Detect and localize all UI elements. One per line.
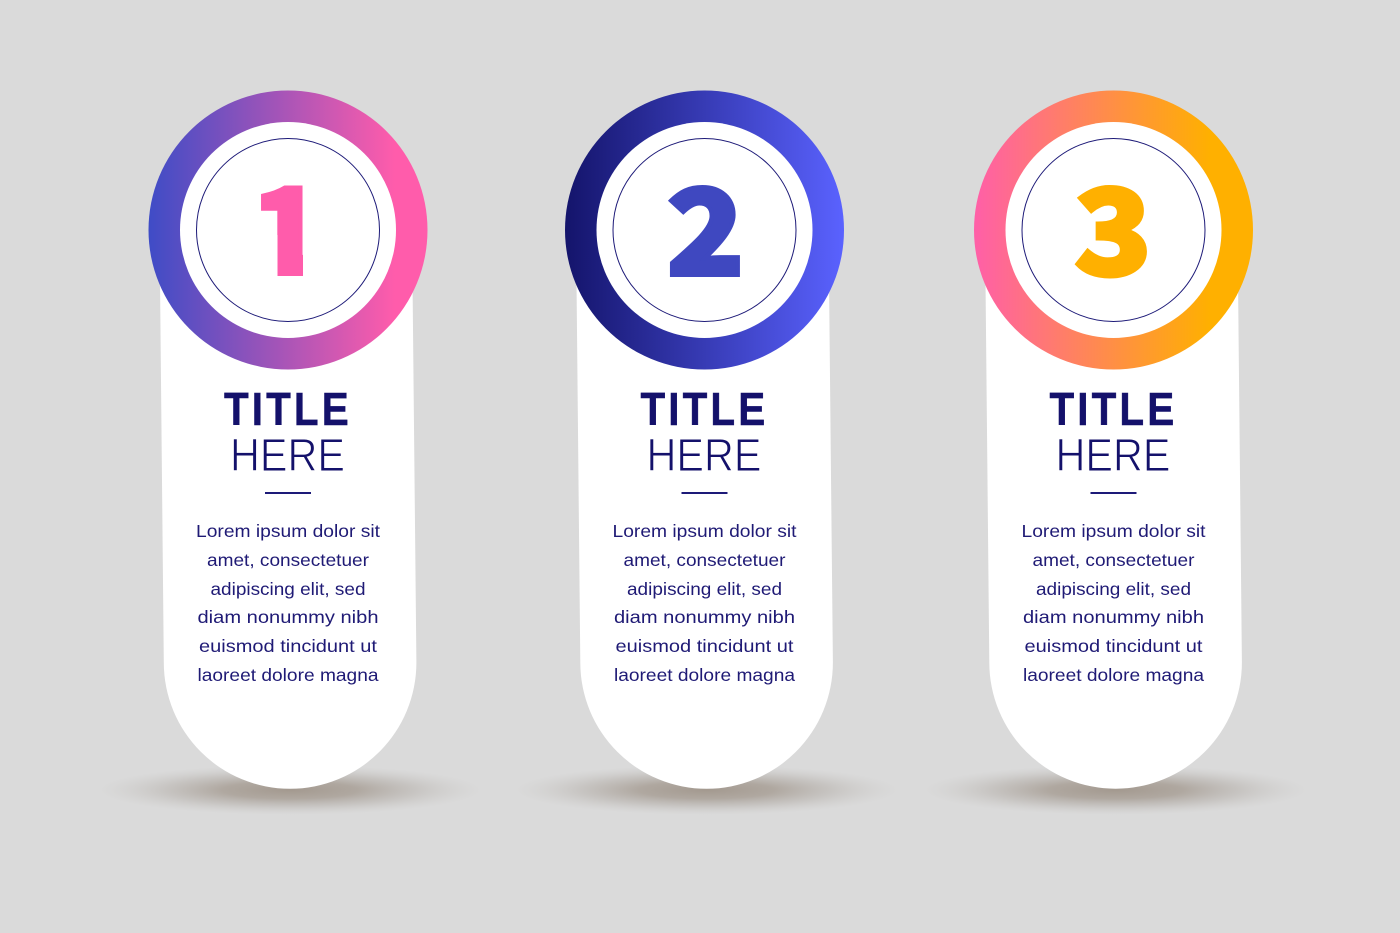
- body text: laoreet dolore magna: [1023, 665, 1204, 685]
- body text: [1022, 521, 1206, 685]
- title: TITLE: [1050, 385, 1177, 436]
- subtitle: HERE: [230, 429, 345, 481]
- card shadow: [514, 765, 898, 815]
- body text: euismod tincidunt ut: [1024, 636, 1203, 656]
- body text: diam nonummy nibh: [198, 607, 378, 627]
- inner white disc: [180, 122, 396, 338]
- panel: step 2: [514, 90, 898, 815]
- body text: laoreet dolore magna: [198, 665, 379, 685]
- inner white disc: [596, 122, 812, 338]
- card shadow: [924, 765, 1308, 815]
- white card: [576, 230, 833, 789]
- gradient ring: [565, 90, 844, 370]
- body text: adipiscing elit, sed: [210, 579, 366, 599]
- divider: [1090, 492, 1136, 494]
- body text: [612, 521, 797, 685]
- title: TITLE: [224, 385, 352, 436]
- panel: step 1: [129, 90, 450, 811]
- body text: amet, consectetuer: [1032, 550, 1195, 570]
- divider: [682, 492, 728, 494]
- body text: Lorem ipsum dolor sit: [196, 521, 380, 541]
- gradient ring: [974, 90, 1253, 370]
- body text: amet, consectetuer: [207, 550, 369, 570]
- title: TITLE: [640, 385, 768, 436]
- body text: [196, 521, 380, 685]
- body text: Lorem ipsum dolor sit: [612, 521, 797, 541]
- divider: [265, 492, 311, 494]
- body text: euismod tincidunt ut: [199, 636, 377, 656]
- body text: amet, consectetuer: [624, 550, 786, 570]
- thin circle outline: [1022, 138, 1205, 322]
- white card: [160, 230, 416, 789]
- inner white disc: [1006, 122, 1222, 338]
- body text: euismod tincidunt ut: [616, 636, 794, 656]
- gradient ring: [148, 90, 428, 370]
- body text: adipiscing elit, sed: [627, 579, 782, 599]
- white card: [985, 230, 1242, 789]
- number 1: 1: [251, 137, 324, 309]
- body text: diam nonummy nibh: [614, 607, 795, 627]
- body text: laoreet dolore magna: [614, 665, 795, 685]
- thin circle outline: [196, 138, 380, 322]
- number 3: 3: [1074, 138, 1152, 310]
- body text: diam nonummy nibh: [1023, 607, 1204, 627]
- panel: step 3: [924, 90, 1308, 815]
- thin circle outline: [613, 138, 796, 322]
- number 2: 2: [667, 138, 744, 310]
- body text: Lorem ipsum dolor sit: [1022, 521, 1206, 541]
- body text: adipiscing elit, sed: [1036, 579, 1191, 599]
- subtitle: HERE: [646, 429, 762, 481]
- card shadow: [98, 765, 482, 815]
- subtitle: HERE: [1056, 429, 1170, 481]
